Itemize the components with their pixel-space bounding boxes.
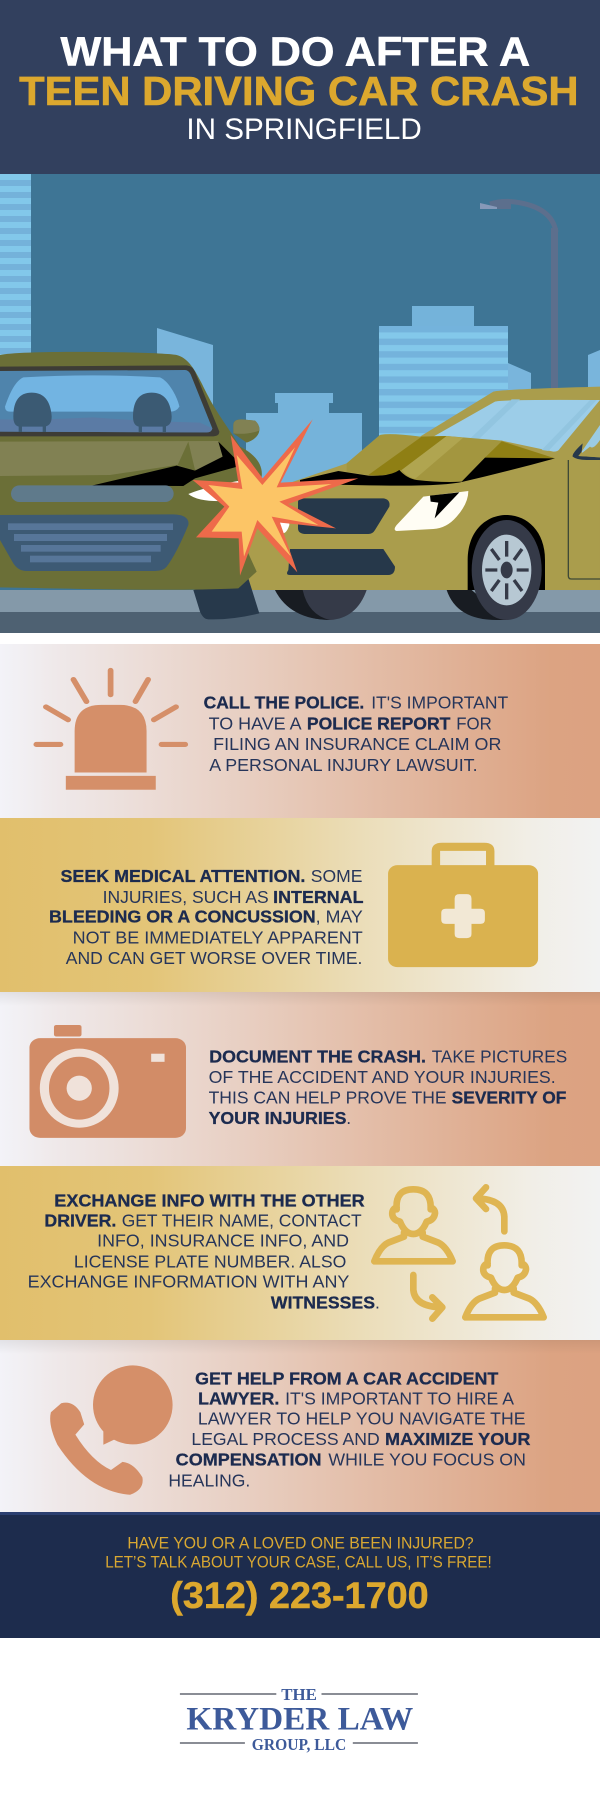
arrow down-right	[413, 1275, 442, 1319]
text: call the police: FILING AN INSURANCE CLAIM OR	[213, 734, 501, 754]
icon: first aid kit	[388, 843, 538, 967]
text: call the police: IT'S IMPORTANT	[371, 693, 508, 713]
text: call the police: TO HAVE A	[209, 714, 302, 734]
text: exchange info: GET THEIR NAME, CONTACT	[122, 1210, 362, 1230]
icon: phone and speech bubble	[50, 1365, 173, 1495]
headlight	[395, 491, 468, 531]
text: get help from a lawyer	[168, 1369, 531, 1490]
text: seek medical attention: INJURIES, SUCH AS	[103, 887, 269, 907]
text: exchange info: DRIVER.	[44, 1210, 116, 1230]
cta text line 2: LET’S TALK ABOUT YOUR CASE, CALL US, IT’S FREE!	[105, 1554, 492, 1572]
text: call the police: POLICE REPORT	[307, 714, 451, 734]
front trim	[11, 485, 174, 502]
person one	[374, 1189, 453, 1261]
cta text line 1: HAVE YOU OR A LOVED ONE BEEN INJURED?	[127, 1534, 474, 1552]
step 5 panel: get help from a lawyer	[0, 1340, 600, 1512]
text: get help from a lawyer: HEALING.	[168, 1470, 250, 1490]
text: get help from a lawyer: GET HELP FROM A CAR ACCIDENT	[195, 1369, 499, 1389]
green car, left	[0, 352, 262, 619]
text: seek medical attention	[49, 866, 364, 968]
step 3 panel: document the crash	[0, 992, 600, 1166]
step 4 panel: exchange info	[0, 1166, 600, 1340]
text: seek medical attention: SEEK MEDICAL ATTENTION.	[60, 866, 305, 886]
front wheel	[468, 515, 545, 590]
hood	[0, 441, 223, 476]
phone number: (312) 223-1700	[170, 1575, 429, 1616]
yellow car, right	[247, 387, 600, 620]
windshield	[0, 365, 219, 436]
text: document the crash: SEVERITY OF	[452, 1088, 567, 1108]
text: get help from a lawyer: MAXIMIZE YOUR	[385, 1429, 531, 1449]
arrow up-left	[476, 1187, 504, 1231]
text: seek medical attention: SOME	[311, 866, 362, 886]
step 1 panel: call the police	[0, 644, 600, 818]
text: document the crash	[209, 1047, 567, 1128]
logo: the kryder law group: THE	[281, 1685, 317, 1704]
icon: police siren	[36, 670, 185, 790]
subtitle: in springfield: IN SPRINGFIELD	[186, 113, 422, 146]
text: get help from a lawyer: COMPENSATION	[176, 1450, 322, 1470]
vents	[298, 498, 390, 534]
person two	[465, 1245, 544, 1317]
logo: the kryder law group: KRYDER LAW	[186, 1702, 413, 1738]
crash scene illustration	[0, 174, 600, 633]
text: get help from a lawyer: IT'S IMPORTANT TO HIRE A	[285, 1388, 514, 1408]
title: what to do after a: WHAT TO DO AFTER A	[60, 28, 530, 74]
header panel	[0, 0, 600, 174]
call to action panel	[0, 1512, 600, 1638]
text: get help from a lawyer: WHILE YOU FOCUS ON	[328, 1450, 526, 1470]
text: exchange info: EXCHANGE INFORMATION WITH ANY	[28, 1272, 350, 1292]
far wheel	[275, 590, 367, 620]
logo: the kryder law group: GROUP, LLC	[252, 1735, 346, 1754]
grille	[0, 514, 188, 571]
seats	[13, 393, 172, 432]
road	[0, 590, 600, 633]
text: document the crash: OF THE ACCIDENT AND YOUR INJURIES.	[209, 1067, 556, 1087]
text: document the crash: YOUR INJURIES	[209, 1108, 346, 1128]
text: exchange info: EXCHANGE INFO WITH THE OTHER	[54, 1190, 365, 1210]
text: get help from a lawyer: LAWYER TO HELP YOU NAVIGATE THE	[198, 1408, 526, 1428]
crash burst	[193, 419, 358, 576]
headlight	[188, 481, 240, 501]
text: document the crash: TAKE PICTURES	[432, 1047, 567, 1067]
icon: camera	[29, 1025, 186, 1138]
text: seek medical attention: BLEEDING OR A CONCUSSION	[49, 907, 316, 927]
text: call the police: CALL THE POLICE.	[204, 693, 364, 713]
mirror	[233, 419, 259, 443]
text: get help from a lawyer: LAWYER.	[198, 1388, 279, 1408]
text: seek medical attention: INTERNAL	[273, 887, 364, 907]
logo: the kryder law group	[180, 1685, 418, 1754]
icon: two people exchanging	[374, 1187, 544, 1319]
title: teen driving car crash: TEEN DRIVING CAR CRASH	[19, 68, 579, 114]
text: call the police	[204, 693, 508, 775]
text: call the police: A PERSONAL INJURY LAWSUIT.	[209, 755, 478, 775]
text: call the police: FOR	[456, 714, 492, 734]
text: seek medical attention: , MAY	[316, 907, 363, 927]
text: document the crash: THIS CAN HELP PROVE THE	[209, 1088, 447, 1108]
city buildings	[0, 174, 600, 500]
street lamp	[480, 201, 558, 393]
text: document the crash: .	[346, 1108, 351, 1128]
text: exchange info	[28, 1190, 380, 1312]
text: seek medical attention: AND CAN GET WORSE OVER TIME.	[66, 948, 362, 968]
step 2 panel: seek medical attention	[0, 818, 600, 992]
text: get help from a lawyer: LEGAL PROCESS AND	[191, 1429, 380, 1449]
text: exchange info: LICENSE PLATE NUMBER. ALSO	[74, 1251, 346, 1271]
text: exchange info: INFO, INSURANCE INFO, AND	[97, 1231, 349, 1251]
text: exchange info: .	[375, 1292, 380, 1312]
text: document the crash: DOCUMENT THE CRASH.	[209, 1047, 426, 1067]
text: seek medical attention: NOT BE IMMEDIATELY APPARENT	[73, 928, 363, 948]
text: exchange info: WITNESSES	[271, 1292, 375, 1312]
